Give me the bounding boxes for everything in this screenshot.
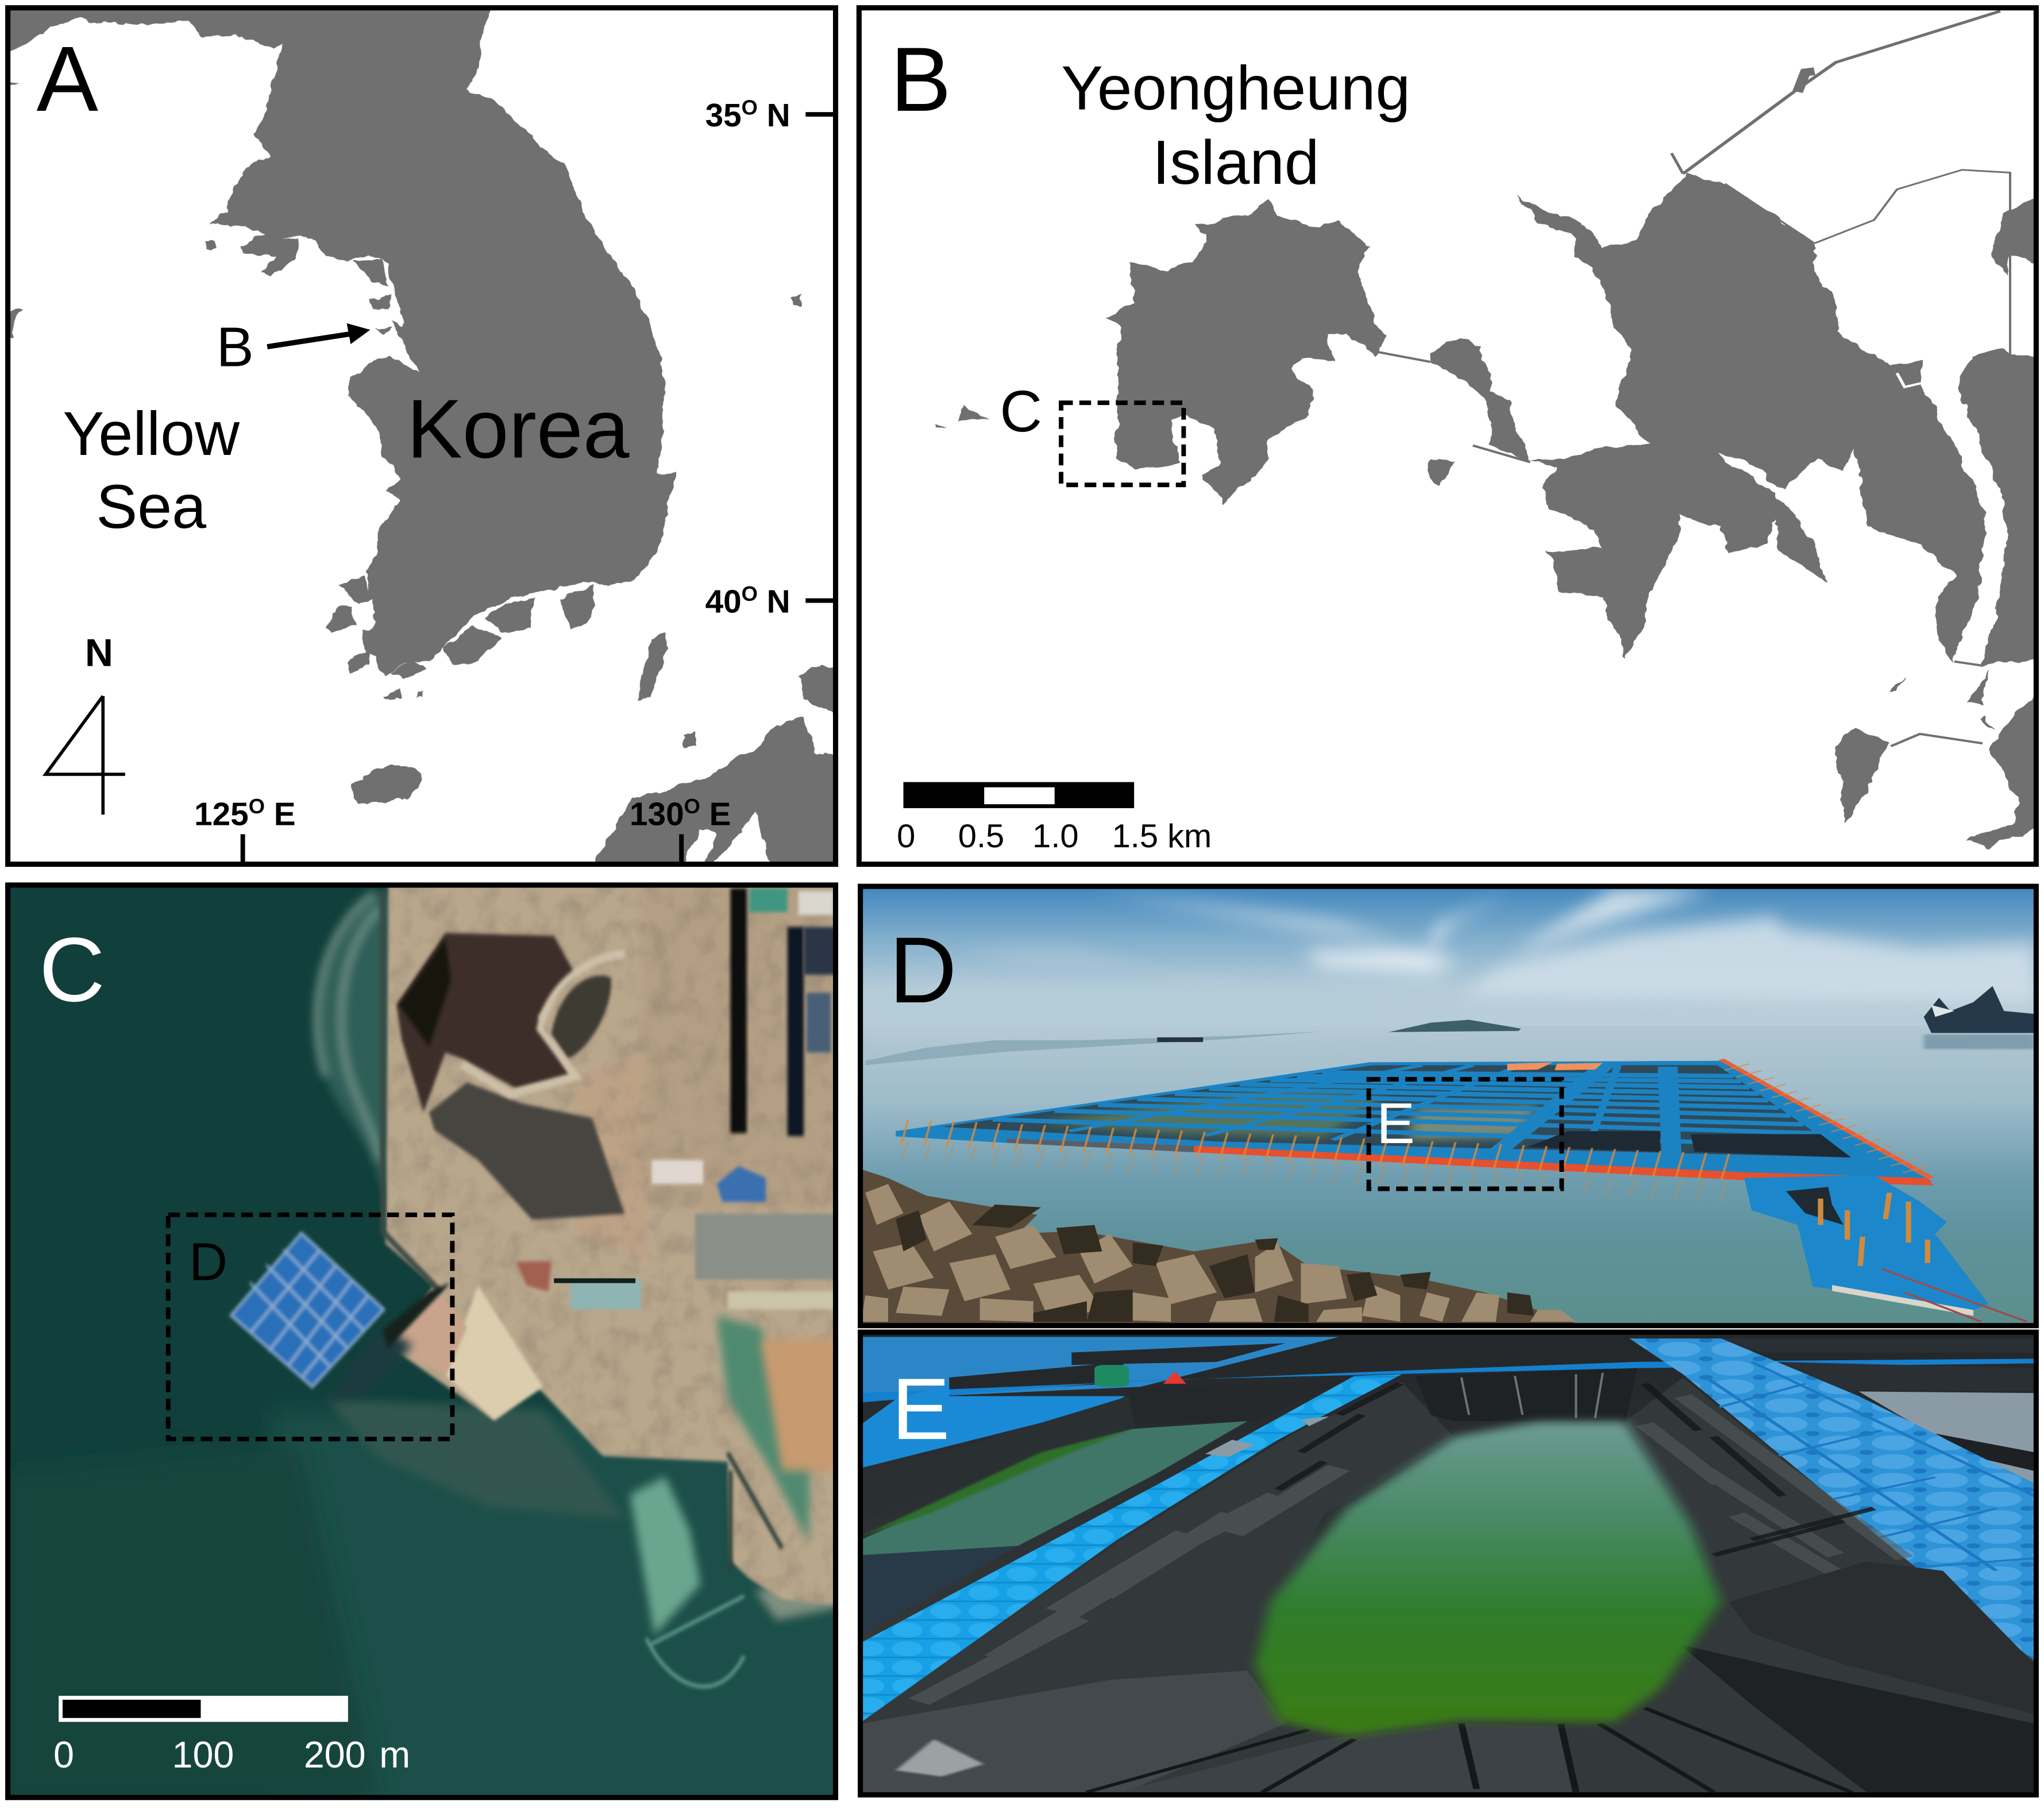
latitude tick 40 N: N [758,584,790,620]
label: Yeongheung Island: Island [1152,128,1319,198]
scale bar: 100 [172,1734,234,1776]
clouds [865,889,2035,1037]
distant islands and ship [865,986,2035,1065]
scale bar: 0 [897,818,915,855]
floating farm raft [896,1059,2027,1322]
label: Yeongheung Island: Yeongheung [1061,53,1410,124]
latitude tick 35 N: N [758,98,790,134]
label: C: C [1000,379,1042,444]
mooring poles [904,1133,1744,1168]
tetrapod breakwater rocks [861,1170,1576,1323]
mottled land texture [380,885,842,1608]
longitude tick 130 E: O [684,794,700,818]
longitude tick 125 E: O [249,794,265,818]
label: E: E [1376,1092,1415,1156]
label: D: D [189,1232,227,1291]
panel A: Korea location map [3,3,847,874]
longitude tick 125 E [194,794,296,863]
label: Yellow Sea: Sea [96,472,206,541]
latitude tick 35 N [705,96,834,134]
longitude tick 130 E [630,794,731,863]
scale bar: 200 [304,1734,366,1776]
scale bar [897,782,1212,855]
panel D: photo of floating farm [858,885,2042,1325]
longitude tick 125 E: 125 [194,796,249,832]
left pond water [861,1421,1247,1555]
scale bar: 1.0 [1032,818,1079,855]
green algae pond water [1255,1422,1721,1736]
dashed box: extent of panel E [1369,1079,1561,1189]
photo scene [858,1331,2042,1799]
panel letter D: D [889,917,957,1022]
arrow: pointing to site B [267,323,370,347]
background rafts and ponds [861,1337,2035,1521]
dashed box: extent of panel C [1061,403,1183,485]
longitude tick 125 E: E [265,796,296,832]
dashed box: extent of panel D [168,1215,452,1439]
label: B: B [217,316,254,379]
latitude tick 40 N [705,582,834,620]
photo scene [858,885,2042,1325]
scale bar: m [379,1734,410,1776]
longitude tick 130 E: 130 [630,796,684,832]
scale bar: 0 [53,1734,74,1776]
scale bar: 1.5 km [1112,818,1212,855]
map: Korean peninsula and surrounding land [3,3,847,874]
label: Yellow Sea: Yellow [63,399,240,468]
panel letter A: A [37,28,99,131]
panel letter B: B [890,28,951,130]
map: island coastlines [934,11,2044,846]
north arrow [45,631,125,815]
latitude tick 35 N: O [742,96,758,119]
scale bar [53,1696,410,1776]
panel letter E: E [892,1360,950,1458]
label: Korea: Korea [407,382,630,475]
panel B: Yeongheung Island map [859,8,2044,864]
farm raft diamond [231,1233,384,1387]
north arrow: N [85,631,113,675]
latitude tick 40 N: O [742,582,758,605]
latitude tick 35 N: 35 [705,98,742,134]
longitude tick 130 E: E [700,796,731,832]
panel E: photo of pond close-up [858,1331,2042,1799]
satellite scene [8,885,869,1810]
latitude tick 40 N: 40 [705,584,742,620]
black pond liner [861,1377,2035,1792]
scale bar: 0.5 [958,818,1004,855]
liner bank folds [919,1384,1904,1701]
blue walkways [861,1375,1402,1722]
panel letter C: C [39,918,105,1021]
panel C: satellite image [8,885,869,1810]
